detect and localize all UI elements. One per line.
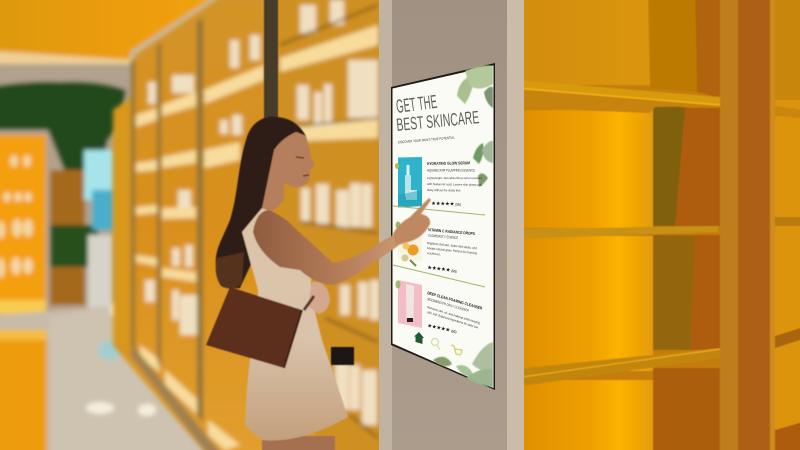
product card 1: dewy without the sticky feel.: [427, 188, 461, 193]
product card 3: MOONBREATH DAILY CLEANSER: [427, 297, 469, 313]
leaves bottom right: [433, 342, 493, 387]
store background: left corridor: [0, 0, 270, 450]
compartment 4: [515, 380, 654, 450]
glowing shelf bands: [136, 25, 378, 450]
product card 2: ★★★★★ (5/5): [427, 264, 457, 275]
handbag: [206, 287, 314, 368]
shelving wall in perspective: [113, 0, 390, 450]
touchscreen: BEST SKINCARE: [395, 107, 480, 135]
touchscreen: [391, 63, 495, 390]
vertical uprights: [131, 17, 203, 424]
product card 2: GLOWBURST C ESSENCE: [428, 234, 459, 240]
product card 3: Removes dirt, oil, and makeup while keeping: [427, 305, 481, 325]
subtitle: DISCOVER YOUR SKIN'S TRUE POTENTIAL: [398, 136, 455, 144]
nav icon: cart: [451, 345, 462, 355]
product card 1: Lightweight, fast-absorbing serum packed: [427, 176, 482, 180]
shelf 2: [515, 226, 718, 239]
product card 2: routines.: [427, 251, 441, 256]
floor reflection panel: [0, 330, 47, 450]
kiosk pillar: [379, 0, 524, 450]
hanging plants: [0, 82, 126, 305]
woman: [206, 117, 431, 450]
screen bezel: [391, 63, 495, 390]
product card 1: AQUABLOOM PLUMPING ESSENCE: [427, 168, 475, 172]
product image: cleanser: [398, 280, 422, 328]
product card 3: ★★★★★ (5/5): [427, 322, 457, 335]
dark upright: [264, 0, 278, 125]
right shelving: [515, 0, 800, 450]
face and neck: [262, 132, 315, 212]
product card 1: HYDRATING GLOW SERUM: [427, 160, 471, 166]
screen surface: [392, 66, 494, 388]
product card 2: [393, 222, 485, 287]
product card 3: [396, 280, 483, 335]
nav icon: home: [414, 332, 424, 344]
product card 1: [393, 157, 485, 215]
title: GET THE: [395, 92, 438, 118]
product card 3: skin soft. Balanced ingredients for daily use.: [427, 310, 480, 330]
shelf edges: [280, 5, 378, 438]
product image: citrus: [398, 222, 422, 266]
product card 3: DEEP CLEAN FOAMING CLEANSER: [427, 290, 483, 311]
blue doorway glow: [84, 150, 114, 315]
leaves top right: [457, 66, 493, 187]
product card 1: with hyaluronic acid. Leaves skin plump and: [427, 182, 482, 187]
closed eye and lips: [296, 157, 309, 176]
ceiling light strip: [0, 50, 133, 72]
product card 2: VITAMIN C RADIANCE DROPS: [428, 227, 475, 236]
resting hand: [308, 282, 330, 314]
product card 2: Brightens dull skin, fades dark spots, and: [427, 241, 477, 250]
right column: [720, 0, 738, 450]
product card 2: boosts natural glow. Perfect for morning: [427, 246, 477, 255]
nav icon: search: [432, 338, 440, 350]
floor: [0, 306, 225, 450]
shelf 3: [515, 348, 720, 387]
back wall: [0, 64, 135, 316]
dress: [242, 208, 348, 441]
product image: serum: [398, 157, 422, 208]
compartment 3: [515, 236, 653, 371]
left illuminated panel: [0, 135, 46, 314]
product card 1: ★★★★★ (5/5): [431, 200, 461, 208]
compartment 2: [515, 110, 653, 228]
hair: [216, 117, 306, 289]
legs: [262, 436, 335, 450]
dark sample box: [331, 347, 354, 365]
top compartment: [515, 0, 719, 85]
blurred bottles: [145, 0, 379, 425]
hand pointing: [393, 198, 431, 246]
upper arm and forearm: [253, 210, 398, 285]
ceiling: [0, 0, 240, 66]
shelf 1: [515, 80, 720, 106]
